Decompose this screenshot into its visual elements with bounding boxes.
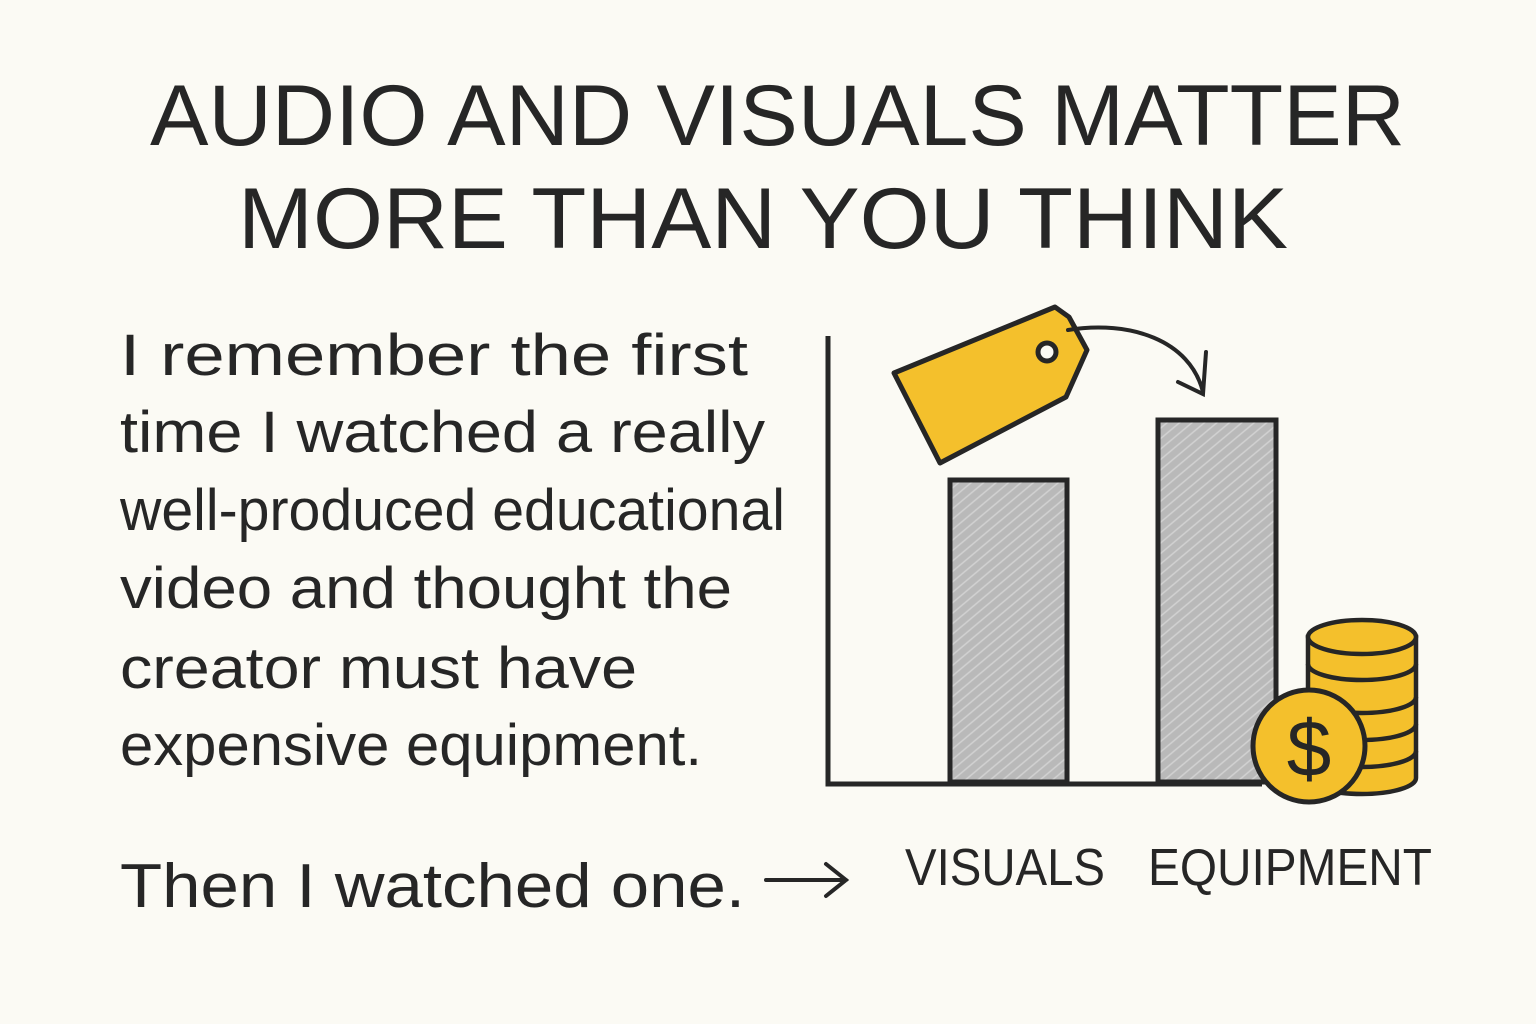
text block: story: expensive equipment. <box>120 713 702 778</box>
title: MORE THAN YOU THINK <box>238 171 1288 267</box>
icon: price tag <box>894 307 1087 463</box>
title <box>150 68 1405 267</box>
label: visuals: VISUALS <box>905 839 1105 897</box>
text block: story: time I watched a really <box>120 400 765 465</box>
icon: dollar coin: $ <box>1287 704 1331 793</box>
arrow: tag to equipment <box>1068 328 1206 394</box>
text block: story: I remember the first <box>120 323 748 388</box>
text block: story: video and thought the <box>120 556 732 621</box>
title: AUDIO AND VISUALS MATTER <box>150 68 1405 164</box>
text: then I watched one: Then I watched one. <box>120 852 745 921</box>
arrow: right <box>766 864 846 896</box>
icon: coin stack <box>1308 620 1416 794</box>
text block: story: creator must have <box>120 636 637 701</box>
label: equipment: EQUIPMENT <box>1148 839 1432 897</box>
text block: story <box>119 323 785 778</box>
bar: visuals <box>950 480 1067 782</box>
bar: equipment <box>1158 420 1276 782</box>
text block: story: well-produced educational <box>119 478 785 543</box>
axes <box>828 336 1262 784</box>
bar chart <box>828 336 1276 784</box>
icon: dollar coin <box>1253 690 1365 802</box>
